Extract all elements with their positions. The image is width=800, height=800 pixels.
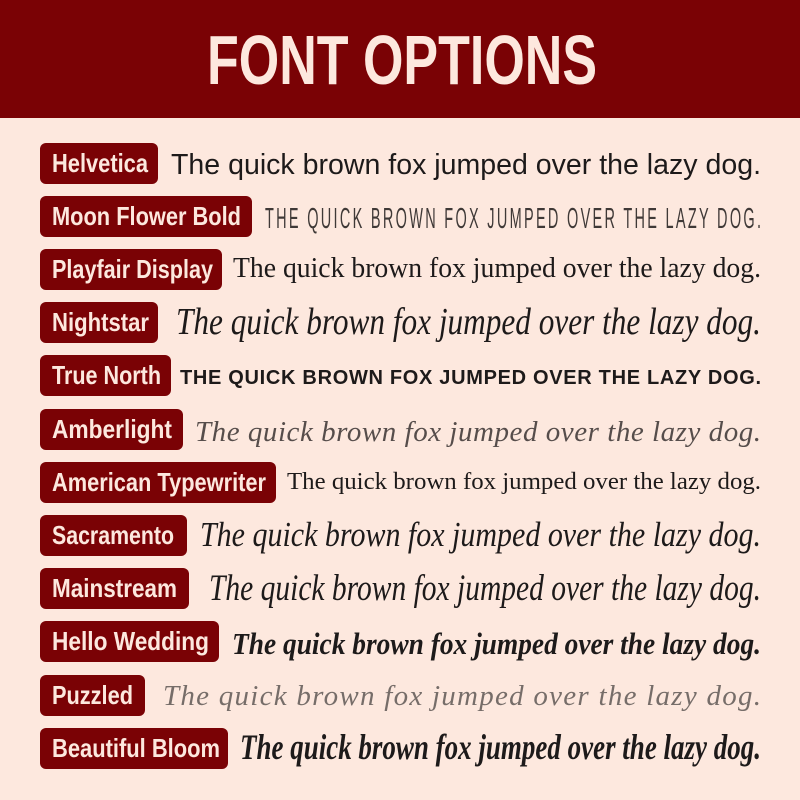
row: True North: True North [52, 360, 161, 390]
row: Helvetica: Helvetica [52, 148, 148, 178]
row: True North: THE QUICK BROWN FOX JUMPED OVER THE LAZY DOG. [180, 367, 761, 389]
row: Puzzled: The quick brown fox jumped over the lazy dog. [163, 680, 761, 712]
row: Playfair Display [40, 249, 761, 290]
row: Amberlight: Amberlight [52, 414, 172, 444]
row: Helvetica [40, 143, 761, 184]
row: Beautiful Bloom [40, 727, 761, 769]
row: Amberlight: The quick brown fox jumped over the lazy dog. [195, 416, 761, 448]
row: Beautiful Bloom: Beautiful Bloom [52, 733, 220, 763]
row: Hello Wedding: Hello Wedding [52, 626, 209, 656]
row: Puzzled: Puzzled [52, 680, 133, 710]
row: Moon Flower Bold [40, 196, 761, 237]
row: American Typewriter: The quick brown fox jumped over the lazy dog. [287, 469, 761, 495]
row: Moon Flower Bold: Moon Flower Bold [52, 201, 241, 231]
row: Moon Flower Bold: THE QUICK BROWN FOX JUMPED OVER THE LAZY DOG. [265, 201, 761, 234]
row: Nightstar: Nightstar [52, 307, 149, 337]
row: Playfair Display: Playfair Display [52, 254, 213, 284]
row: Puzzled [40, 675, 761, 716]
row: Mainstream: Mainstream [52, 573, 177, 603]
row: Helvetica: The quick brown fox jumped over the lazy dog. [171, 149, 761, 181]
row: American Typewriter: American Typewriter [52, 467, 266, 497]
row: Sacramento: Sacramento [52, 520, 174, 550]
title: FONT OPTIONS [207, 21, 597, 99]
row: Hello Wedding [40, 621, 761, 662]
row: American Typewriter [40, 462, 761, 503]
row: Playfair Display: The quick brown fox jumped over the lazy dog. [233, 253, 761, 284]
row: True North [40, 355, 761, 396]
row: Amberlight [40, 409, 761, 450]
header banner [0, 0, 800, 118]
